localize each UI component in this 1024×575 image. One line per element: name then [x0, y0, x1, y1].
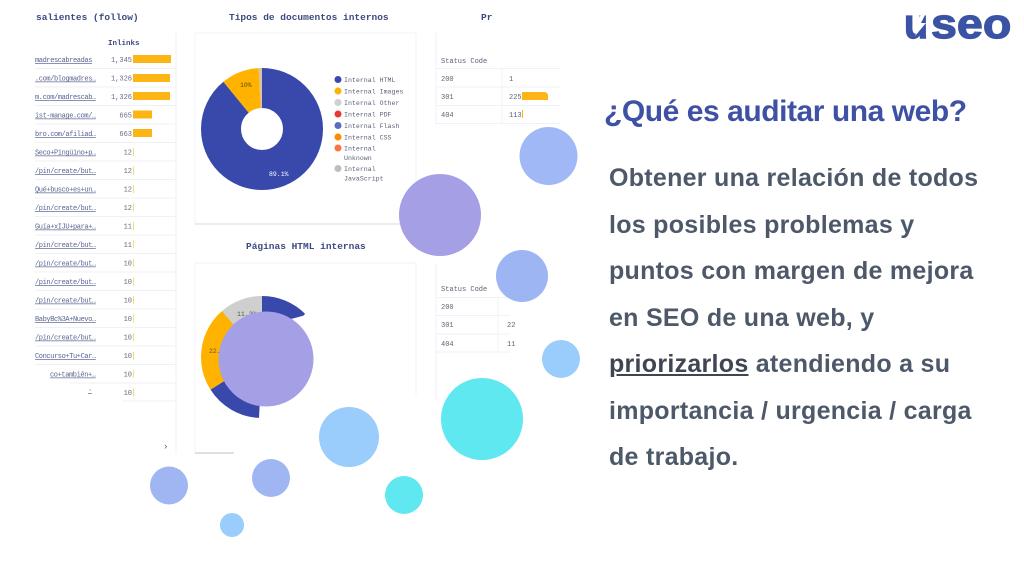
donut value labels: 11.3%: [237, 311, 257, 318]
row labels: m.com/madrescab…: [35, 94, 96, 102]
row values: 11: [124, 224, 132, 232]
decorative circles: [150, 127, 580, 537]
row values: 10: [124, 260, 132, 268]
table text: 200: [441, 304, 454, 312]
table text: 22: [507, 322, 515, 330]
table text: [441, 58, 522, 120]
row values: 10: [124, 353, 132, 361]
row labels: /pin/create/but…: [35, 168, 96, 176]
text block: definition: puntos con margen de mejora: [609, 257, 974, 285]
row labels: Seco+Pingüino+p…: [35, 150, 96, 158]
legend: JavaScript: [344, 176, 384, 182]
row values: 1,326: [111, 76, 132, 84]
donut value labels: 89.1%: [269, 171, 289, 178]
legend: Internal Images: [344, 88, 403, 96]
text block: definition: de trabajo.: [609, 443, 738, 471]
table text: [441, 286, 515, 349]
heading: salientes: salientes (follow): [36, 12, 139, 23]
panel: status codes table top: [436, 12, 560, 124]
legend: Internal: [344, 146, 376, 152]
table text: 200: [441, 76, 454, 84]
row values: 663: [119, 131, 132, 139]
table text: 301: [441, 322, 454, 330]
panel: internal document types: [195, 12, 416, 224]
text block: definition: en SEO de una web, y: [609, 304, 874, 332]
row labels: [35, 57, 96, 395]
row labels: /pin/create/but…: [35, 260, 96, 268]
donut value labels: 10%: [240, 82, 252, 89]
row values: 665: [119, 112, 132, 120]
donut erased edge: [291, 315, 306, 332]
card: [195, 33, 416, 224]
row values: 12: [124, 205, 132, 213]
panel: outbound links table: [35, 12, 176, 454]
panel: internal HTML pages: [195, 241, 416, 453]
legend: Internal PDF: [344, 112, 392, 118]
card: [195, 263, 416, 453]
row values: 12: [124, 186, 132, 194]
inlinks bars: [133, 55, 171, 396]
row values: 10: [124, 372, 132, 380]
donut value labels: [209, 311, 257, 355]
table text: 301: [441, 94, 454, 102]
donut value labels: 22.: [209, 348, 221, 355]
row labels: co+también+…: [50, 372, 96, 380]
row labels: ·: [88, 387, 92, 395]
row values: 10: [124, 334, 132, 342]
row values: 11: [124, 242, 132, 250]
table text: Status Code: [441, 58, 487, 66]
row labels: /pin/create/but…: [35, 279, 96, 287]
table text: 404: [441, 112, 454, 120]
text block: definition: importancia / urgencia / carga: [609, 396, 972, 424]
legend: Internal HTML: [344, 77, 395, 84]
heading: tipos de documentos: Tipos de documentos internos: [229, 12, 389, 23]
text block: definition: [609, 164, 978, 471]
row labels: /pin/create/but…: [35, 242, 96, 250]
row labels: Qué+busco+es+un…: [35, 186, 96, 194]
status bar: [522, 92, 548, 100]
row values: 10: [124, 390, 132, 398]
legend: Internal Flash: [344, 123, 399, 130]
row labels: bro.com/afiliad…: [35, 131, 96, 139]
panel: status codes table bottom: [436, 263, 515, 400]
table lines: [436, 263, 510, 400]
table lines: [436, 33, 560, 124]
row values: 12: [124, 150, 132, 158]
heading fragment: Pr: [481, 12, 493, 23]
text block: definition: los posibles problemas y: [609, 210, 914, 238]
donut value labels: [240, 82, 289, 178]
legend: Internal Other: [344, 100, 399, 107]
row labels: BabyBc%3A+Nuevo…: [35, 316, 96, 324]
row labels: Concurso+Tu+Car…: [35, 353, 96, 361]
table text: 1: [509, 76, 513, 84]
pagination arrow: ›: [163, 442, 168, 452]
text block: definition: priorizarlos atendiendo a su: [609, 350, 950, 378]
row values: 10: [124, 316, 132, 324]
table text: 404: [441, 341, 454, 349]
table text: Status Code: [441, 286, 487, 294]
table text: 11: [507, 341, 515, 349]
row labels: /pin/create/but…: [35, 334, 96, 342]
row values: 1,326: [111, 94, 132, 102]
row values: 1,345: [111, 57, 132, 65]
row labels: /pin/create/but…: [35, 205, 96, 213]
row separators: [35, 68, 176, 401]
row labels: ist-manage.com/…: [35, 112, 96, 120]
legend: Internal CSS: [344, 134, 392, 142]
heading: paginas html: Páginas HTML internas: [246, 241, 366, 252]
table card outline: [175, 33, 177, 454]
logo: useo: u: [904, 0, 928, 47]
row values: 12: [124, 168, 132, 176]
row labels: Guía+xIJU+para+…: [35, 224, 96, 232]
row labels: /pin/create/but…: [35, 298, 96, 306]
table text: 225: [509, 94, 522, 102]
heading: main title: ¿Qué es auditar una web?: [604, 95, 967, 128]
text block: definition: Obtener una relación de todos: [609, 164, 978, 192]
legend: Internal: [344, 166, 376, 173]
donut chart: html pages: [221, 316, 303, 398]
legend: Unknown: [344, 155, 372, 162]
row labels: .com/blogmadres…: [35, 76, 96, 84]
legend: [334, 76, 403, 182]
row values: [111, 57, 132, 398]
row labels: madrescabreadas: [35, 57, 92, 65]
row values: 10: [124, 298, 132, 306]
table text: 113: [509, 112, 522, 120]
logo: useo: seo: [931, 1, 1011, 47]
row values: 10: [124, 279, 132, 287]
column header: inlinks: Inlinks: [108, 40, 140, 48]
donut chart: document types: [221, 88, 303, 170]
